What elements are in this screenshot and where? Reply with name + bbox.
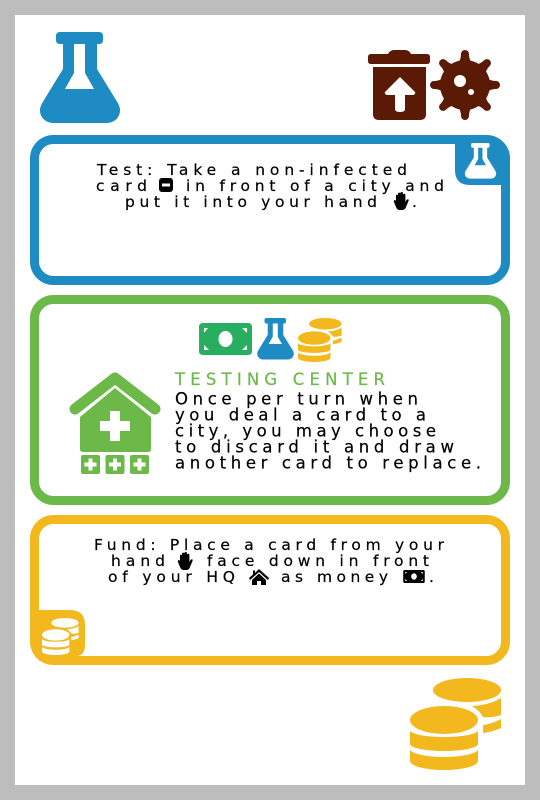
icon tab: small flask bbox=[455, 139, 510, 185]
icon: large blue flask bbox=[40, 32, 120, 123]
text: testing center ability: to discard it and draw bbox=[175, 438, 454, 456]
text: testing center ability bbox=[175, 390, 481, 472]
sub-icon: plus tiles bbox=[81, 455, 149, 474]
text: test rule: . bbox=[412, 193, 417, 211]
icon: large coins bbox=[410, 678, 501, 770]
icon: discard pile trash can bbox=[368, 50, 430, 120]
icon: home bbox=[249, 569, 269, 585]
icon: small blue flask bbox=[257, 318, 294, 360]
icon: hand bbox=[394, 192, 409, 210]
text: fund rule: . bbox=[429, 568, 434, 586]
text: fund rule: Fund: Place a card from your bbox=[94, 536, 445, 554]
icon: hand bbox=[178, 552, 193, 570]
text: test rule: Test: Take a non-infected bbox=[96, 161, 407, 179]
text: testing center ability: you deal a card to a bbox=[175, 406, 426, 424]
text: fund rule: hand bbox=[111, 552, 165, 570]
icon tab: small coins bbox=[39, 610, 85, 661]
panel: test action bbox=[34, 139, 510, 280]
icon: card minus bbox=[159, 178, 173, 192]
heading: testing center: TESTING CENTER bbox=[174, 370, 385, 389]
text: fund rule bbox=[94, 536, 445, 586]
icon: testing center house bbox=[75, 378, 155, 474]
text: fund rule: face down in front bbox=[207, 552, 429, 570]
panel: fund action bbox=[34, 520, 506, 661]
text: testing center ability: another card to replace. bbox=[175, 454, 481, 472]
icon: virus gear bbox=[430, 50, 500, 120]
text: testing center ability: city, you may choose bbox=[175, 422, 436, 440]
text: test rule: card bbox=[96, 177, 147, 195]
text: test rule bbox=[96, 161, 444, 211]
text: test rule: put it into your hand bbox=[125, 193, 377, 211]
text: test rule: in front of a city and bbox=[186, 177, 444, 195]
text: testing center ability: Once per turn when bbox=[175, 390, 418, 408]
icon: money bill bbox=[403, 570, 425, 583]
text: fund rule: as money bbox=[281, 568, 388, 586]
text: fund rule: of your HQ bbox=[108, 568, 235, 586]
panel: testing center bbox=[34, 300, 506, 500]
icon: green money bill bbox=[199, 323, 252, 355]
icon: small coins bbox=[298, 318, 342, 362]
